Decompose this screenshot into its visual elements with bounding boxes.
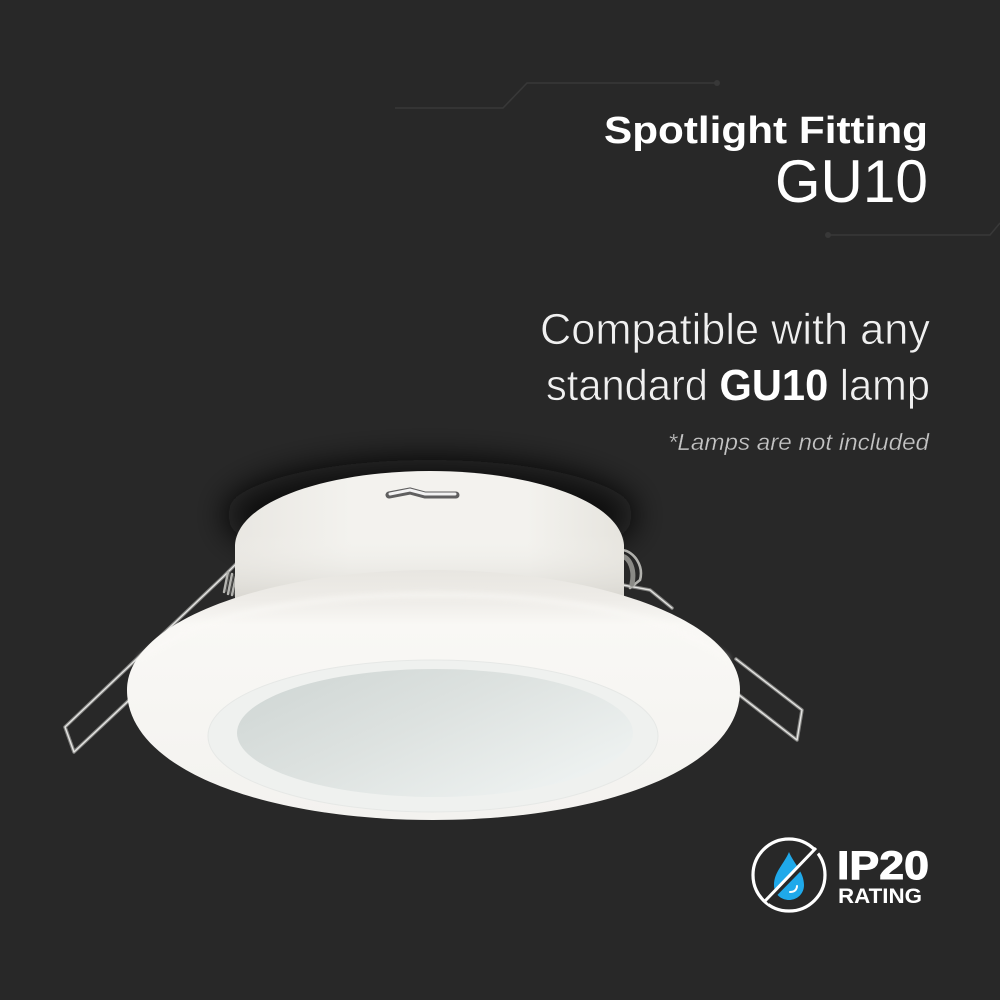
lens outer ring bbox=[208, 660, 658, 812]
IP20 rating badge bbox=[753, 839, 929, 911]
circuit line top bbox=[395, 80, 720, 108]
note: *Lamps are not included bbox=[668, 429, 930, 455]
title bbox=[604, 110, 928, 215]
circuit line right bbox=[825, 223, 1000, 238]
icon: no water drop bbox=[753, 839, 825, 911]
shadow behind fitting bbox=[225, 460, 635, 570]
right spring wire bbox=[622, 550, 802, 740]
frosted lens bbox=[237, 669, 633, 797]
flange bbox=[127, 570, 740, 820]
retaining clip bbox=[389, 490, 456, 495]
left spring wire bbox=[65, 560, 242, 752]
compatibility text: standard GU10 lamp bbox=[546, 361, 930, 410]
rating text: RATING bbox=[838, 885, 922, 908]
compatibility text bbox=[540, 305, 930, 410]
downlight fitting bbox=[65, 460, 802, 820]
title: Spotlight Fitting bbox=[604, 110, 928, 152]
compatibility text: Compatible with any bbox=[540, 305, 930, 354]
title: GU10 bbox=[775, 148, 928, 215]
fitting body bbox=[235, 471, 624, 600]
rating text bbox=[837, 844, 929, 908]
rating text: IP20 bbox=[837, 844, 929, 888]
